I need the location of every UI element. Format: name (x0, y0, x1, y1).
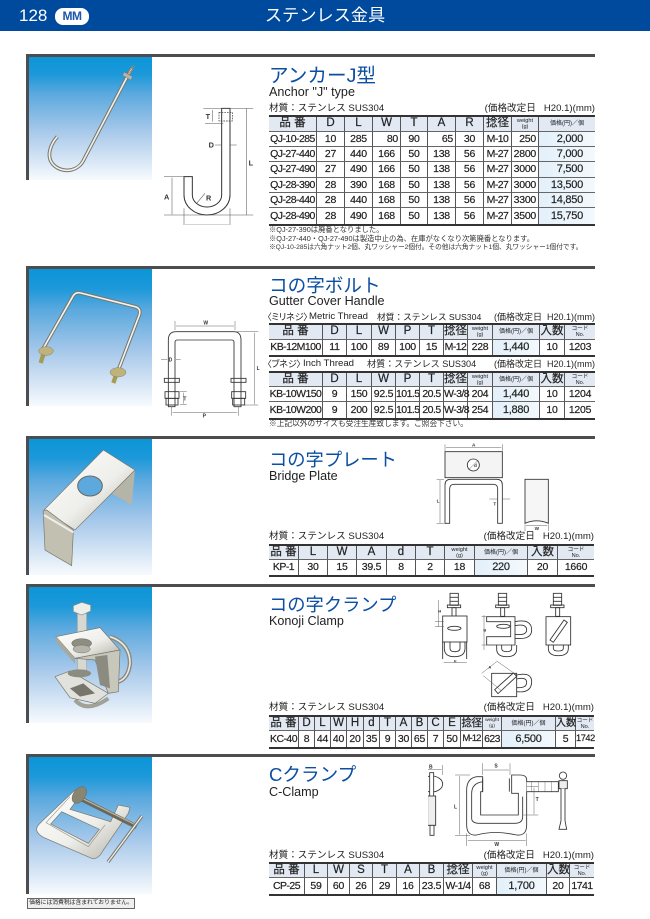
table: bridge plate: A (368, 546, 375, 558)
table: konoji clamp: D (302, 717, 311, 729)
table: Anchor J specifications: 138 (433, 163, 450, 175)
revision date: (価格改定日 H20.1)(mm) (484, 850, 594, 861)
table: Anchor J specifications: 56 (464, 148, 475, 160)
diagram: konoji clamp views: H (438, 608, 441, 613)
table: C clamp: 16 (402, 880, 414, 892)
table: metric thread: 100 (399, 341, 416, 353)
table: inch thread: D (330, 373, 339, 385)
table: inch thread: 9 (332, 388, 337, 400)
table: Anchor J specifications: 168 (378, 210, 395, 222)
table: Anchor J specifications: 440 (350, 194, 367, 206)
material line: 材質：ステンレス SUS304 (269, 103, 384, 114)
table: inch thread: (g) (477, 380, 483, 386)
table: konoji clamp: 6,500 (515, 732, 542, 744)
table: C clamp: 68 (479, 880, 490, 892)
table: Anchor J specifications: 390 (350, 179, 367, 191)
table: inch thread: W (378, 373, 389, 385)
table: Anchor J specifications: D (326, 117, 335, 129)
table: inch thread: 価格(円)／個 (499, 376, 533, 382)
page title: ステンレス金具 (265, 5, 385, 25)
table: konoji clamp: KC-40 (270, 733, 297, 745)
diagram: J bolt dimensions: A (164, 192, 170, 201)
tax note: 価格には消費税は含まれておりません。 (29, 900, 133, 906)
table: inch thread: 捻径 (444, 373, 467, 385)
revision date: (価格改定日 H20.1)(mm) (494, 312, 595, 322)
table: metric thread: T (428, 325, 435, 337)
revision date: (価格改定日 H20.1)(mm) (484, 702, 594, 713)
table: inch thread: 20.5 (422, 388, 441, 400)
diagram: bridge plate dimensions: L (437, 498, 440, 503)
table: metric thread: L (356, 325, 362, 337)
diagram: J bolt dimensions (164, 108, 254, 225)
notes: ※QJ-27-390は廃番となりました。 (269, 225, 384, 234)
table: Anchor J specifications: 56 (464, 210, 475, 222)
table: metric thread: 1203 (569, 341, 591, 353)
table: Anchor J specifications: 490 (350, 210, 367, 222)
table: bridge plate: 220 (492, 561, 510, 573)
table: metric thread: (g) (477, 332, 483, 338)
material line: 材質：ステンレス SUS304 (269, 850, 384, 861)
photo: bridge plate (29, 439, 152, 575)
table: C clamp: 60 (333, 880, 344, 892)
diagram: J bolt dimensions: T (206, 112, 211, 121)
photo: C clamp (29, 757, 152, 894)
inch thread line: Inch Thread (303, 358, 354, 369)
table: konoji clamp: 35 (366, 733, 377, 745)
table: konoji clamp: 入数 (556, 718, 576, 728)
table: inch thread: 10 (546, 388, 558, 400)
table: Anchor J specifications: 15,750 (551, 210, 583, 222)
table: Anchor J specifications: M-27 (487, 148, 508, 160)
table: Anchor J specifications: 30 (464, 133, 475, 145)
table: Anchor J specifications: 3300 (514, 194, 536, 206)
table: Anchor J specifications: 90 (408, 133, 420, 145)
table: bridge plate: 1660 (565, 561, 587, 573)
table: Anchor J specifications: 50 (408, 163, 420, 175)
table: Anchor J specifications: 56 (464, 163, 475, 175)
table: Anchor J specifications: 50 (408, 194, 420, 206)
table: Anchor J specifications: M-27 (487, 179, 508, 191)
panel: Anchor J type (26, 54, 595, 251)
logo: MM: MM (62, 9, 82, 23)
photo: konoji clamp (29, 587, 152, 723)
table: konoji clamp: L (319, 717, 326, 729)
table: bridge plate: 18 (454, 561, 465, 573)
table: C clamp (269, 862, 594, 896)
diagram: C clamp dimensions: W (494, 842, 499, 848)
table: Anchor J specifications: 138 (433, 210, 450, 222)
table: Anchor J specifications: QJ-28-490 (270, 210, 315, 222)
table: bridge plate: 2 (427, 561, 433, 573)
table: bridge plate: No. (572, 552, 580, 558)
table: konoji clamp: C (431, 717, 440, 729)
inch thread line: 材質：ステンレス SUS304 (367, 359, 476, 369)
table: bridge plate: L (310, 546, 316, 558)
table: konoji clamp: T (384, 717, 391, 729)
notes (269, 225, 582, 251)
heading: C clamp: Cクランプ (269, 764, 356, 785)
header bar (0, 0, 650, 31)
table: Anchor J specifications: 168 (378, 179, 395, 191)
diagram: C clamp dimensions: S (494, 764, 498, 770)
table: Anchor J specifications: QJ-10-285 (270, 133, 315, 145)
table: bridge plate: 15 (336, 561, 348, 573)
table: konoji clamp: E (448, 717, 456, 729)
table: Anchor J specifications: 品 番 (279, 117, 306, 129)
table: Anchor J specifications: T (410, 117, 418, 129)
revision date: (価格改定日 H20.1)(mm) (494, 359, 595, 369)
table: bridge plate: (g) (456, 552, 463, 558)
table: C clamp: A (404, 864, 412, 876)
table: C clamp: 1,700 (508, 880, 535, 892)
table: inch thread (269, 371, 595, 420)
table: Anchor J specifications: 440 (350, 148, 367, 160)
table: Anchor J specifications: 捻径 (486, 117, 509, 129)
diagram: U bolt dimensions: T (183, 396, 186, 402)
tax note (27, 898, 135, 909)
table: Anchor J specifications: 50 (408, 148, 420, 160)
diagram: U bolt dimensions: L (257, 366, 260, 372)
table: Anchor J specifications: M-10 (487, 133, 508, 145)
table: C clamp: weight (476, 864, 493, 870)
table: inch thread: 10 (546, 404, 558, 416)
heading: U bolt: コの字ボルト (269, 275, 381, 296)
panel: Bridge Plate (26, 436, 595, 577)
heading: English name: Bridge Plate (269, 469, 338, 483)
table: konoji clamp: H (351, 717, 359, 729)
table: bridge plate: 入数 (531, 546, 554, 558)
table: C clamp: L (313, 864, 319, 876)
material line: 材質：ステンレス SUS304 (269, 702, 384, 713)
table: inch thread: 101.5 (396, 404, 420, 416)
diagram: bridge plate dimensions (436, 443, 549, 531)
table: Anchor J specifications: A (438, 117, 445, 129)
table: bridge plate: T (426, 546, 434, 558)
table: metric thread: D (330, 325, 339, 337)
table: Anchor J specifications: 2800 (514, 148, 536, 160)
table: C clamp: CP-25 (273, 880, 300, 892)
table: konoji clamp: W (333, 717, 344, 729)
table: bridge plate: weight (451, 546, 468, 552)
table: C clamp: W (333, 864, 344, 876)
table: inch thread: No. (576, 380, 584, 386)
table: inch thread: 1,440 (503, 388, 529, 400)
diagram: J bolt dimensions: L (249, 158, 254, 167)
table: inch thread: W-3/8 (444, 388, 469, 400)
table: metric thread: 入数 (540, 325, 564, 337)
table: konoji clamp: 50 (446, 733, 458, 745)
diagram: J bolt dimensions: R (206, 193, 212, 202)
table: inch thread: 1205 (569, 404, 591, 416)
diagram: konoji clamp views: A (488, 664, 491, 669)
table: Anchor J specifications: R (465, 117, 474, 129)
inch thread line (267, 358, 476, 369)
table: metric thread: P (404, 325, 411, 337)
table: bridge plate: 39.5 (362, 561, 381, 573)
table: konoji clamp: 8 (304, 733, 309, 745)
table: Anchor J specifications: 27 (325, 163, 336, 175)
table: C clamp: T (381, 864, 388, 876)
diagram: konoji clamp views (435, 592, 572, 698)
table: Anchor J specifications: M-27 (487, 210, 508, 222)
table: konoji clamp: 品 番 (270, 717, 297, 729)
table: bridge plate: 価格(円)／個 (484, 550, 518, 556)
table: Anchor J specifications: 138 (433, 194, 450, 206)
diagram: bridge plate dimensions: T (493, 502, 496, 507)
panel: Konoji Clamp (26, 584, 595, 749)
table: Anchor J specifications: 56 (464, 194, 475, 206)
table: Anchor J specifications: 168 (378, 194, 395, 206)
table: C clamp: 29 (379, 880, 390, 892)
diagram: konoji clamp views: B (483, 628, 486, 633)
table: Anchor J specifications: 28 (325, 194, 336, 206)
table: Anchor J specifications: 28 (325, 210, 336, 222)
table: Anchor J specifications: 7,500 (557, 163, 583, 175)
table: Anchor J specifications: QJ-28-440 (270, 194, 315, 206)
table: metric thread (269, 323, 595, 357)
table: Anchor J specifications: 56 (464, 179, 475, 191)
revision date: (価格改定日 H20.1)(mm) (485, 103, 595, 114)
table: Anchor J specifications: 13,500 (551, 178, 583, 190)
diagram: U bolt dimensions (161, 320, 260, 420)
table: Anchor J specifications: 27 (325, 148, 336, 160)
table: konoji clamp: 20 (349, 733, 361, 745)
heading: English name: Anchor "J" type (269, 85, 355, 99)
table: konoji clamp: 623 (484, 733, 500, 745)
heading: English name: C-Clamp (269, 785, 319, 799)
table: konoji clamp: 7 (433, 733, 438, 745)
diagram: bridge plate dimensions: W (535, 526, 540, 531)
table: Anchor J specifications: 250 (519, 133, 536, 145)
diagram: konoji clamp views: E (454, 658, 457, 663)
table: Anchor J specifications: 28 (325, 179, 336, 191)
notes: ※QJ-27-440・QJ-27-490は製造中止の為、在庫がなくなり次第廃番となります。 (269, 234, 534, 243)
heading: bridge plate: コの字プレート (269, 449, 397, 470)
table: Anchor J specifications: 50 (408, 179, 420, 191)
table: inch thread: 1204 (569, 388, 591, 400)
table: Anchor J specifications: 価格(円)／個 (550, 121, 584, 127)
table: Anchor J specifications: 3500 (514, 210, 536, 222)
table: inch thread: コード (572, 374, 588, 380)
table: konoji clamp: 65 (414, 733, 425, 745)
metric thread line: 〈ミリネジ〉 (267, 312, 308, 322)
table: inch thread: W-3/8 (444, 404, 469, 416)
table: Anchor J specifications: 80 (387, 133, 398, 145)
table: inch thread: KB-10W200 (270, 404, 321, 416)
table: inch thread: KB-10W150 (270, 388, 321, 400)
table: inch thread: 101.5 (396, 388, 420, 400)
table: metric thread: 11 (329, 341, 340, 353)
table: Anchor J specifications: 7,000 (557, 148, 583, 160)
logo: MM (55, 8, 89, 25)
diagram: bridge plate dimensions: d (474, 463, 477, 468)
diagram: J bolt dimensions: D (209, 140, 214, 149)
page number: 128 (19, 6, 47, 25)
table: konoji clamp: 9 (385, 733, 390, 745)
table: C clamp: S (357, 864, 365, 876)
table: bridge plate: コード (568, 546, 584, 552)
table: Anchor J specifications: 2,000 (557, 132, 583, 144)
table: konoji clamp: 捻径 (462, 717, 482, 729)
table: bridge plate: 品 番 (270, 546, 297, 558)
table: inch thread: P (404, 373, 411, 385)
table: inch thread: 92.5 (374, 404, 393, 416)
table: C clamp: B (428, 864, 435, 876)
table: inch thread: 92.5 (374, 388, 393, 400)
table: C clamp: 捻径 (446, 864, 470, 876)
table: Anchor J specifications: 138 (433, 179, 450, 191)
table: inch thread: weight (472, 374, 488, 380)
photo: anchor J bolt (29, 57, 152, 180)
notes: ※QJ-10-285は六角ナット2個、丸ワッシャー2個付。その他は六角ナット1個、丸ワッシャー1個付です。 (269, 244, 582, 251)
table: inch thread: 9 (332, 404, 337, 416)
table: C clamp: 20 (552, 880, 564, 892)
table: inch thread: 20.5 (422, 404, 441, 416)
table: Anchor J specifications: 50 (408, 210, 420, 222)
table: C clamp: 1741 (571, 880, 593, 892)
table: inch thread: L (356, 373, 362, 385)
heading: English name: Gutter Cover Handle (269, 294, 384, 308)
table: metric thread: 89 (378, 341, 389, 353)
table: inch thread: 254 (472, 404, 488, 416)
table: Anchor J specifications: 285 (350, 133, 367, 145)
table: bridge plate: 20 (537, 561, 548, 573)
table: inch thread: 1,880 (503, 404, 529, 416)
table: Anchor J specifications: 3000 (514, 179, 536, 191)
table: metric thread: 価格(円)／個 (499, 329, 533, 335)
table: Anchor J specifications: 14,850 (551, 194, 583, 206)
table: metric thread: 228 (472, 341, 488, 353)
table: metric thread: M-12 (445, 341, 466, 353)
panel: Gutter Cover Handle (26, 266, 595, 428)
table: konoji clamp: (g) (489, 724, 495, 728)
table: konoji clamp: 44 (317, 733, 328, 745)
table: Anchor J specifications (269, 115, 595, 226)
diagram: U bolt dimensions: D (169, 357, 173, 363)
table: konoji clamp: 5 (563, 733, 568, 745)
diagram: U bolt dimensions: W (203, 320, 208, 326)
table: metric thread: 15 (426, 341, 437, 353)
table: bridge plate: d (398, 546, 404, 558)
table: Anchor J specifications: QJ-28-390 (270, 179, 315, 191)
table: metric thread: No. (576, 332, 584, 338)
panel: C-Clamp (26, 754, 595, 896)
table: konoji clamp: 40 (333, 733, 344, 745)
heading: Anchor J: アンカーJ型 (269, 65, 376, 87)
table: metric thread: 品 番 (282, 325, 309, 337)
table: Anchor J specifications: L (355, 117, 362, 129)
table: konoji clamp: A (400, 717, 407, 729)
photo: U bolt (29, 269, 152, 406)
table: Anchor J specifications: weight (517, 118, 533, 124)
table: C clamp: W-1/4 (445, 880, 471, 892)
table: Anchor J specifications: 166 (378, 163, 395, 175)
table: Anchor J specifications: M-27 (487, 163, 508, 175)
table: C clamp: No. (578, 870, 586, 876)
table: konoji clamp: 価格(円)／個 (512, 720, 546, 726)
table: metric thread: コード (572, 326, 588, 332)
inch thread line: 〈ブネジ〉 (267, 359, 301, 369)
table: metric thread: 10 (546, 341, 558, 353)
table: Anchor J specifications: 138 (433, 148, 450, 160)
table: Anchor J specifications: W (381, 117, 392, 129)
table: inch thread: 入数 (540, 373, 564, 385)
table: inch thread: T (428, 373, 435, 385)
table: konoji clamp: d (368, 717, 375, 729)
table: metric thread: W (378, 325, 389, 337)
table: konoji clamp (269, 715, 594, 749)
table: bridge plate: KP-1 (273, 561, 294, 573)
table: C clamp: 品 番 (273, 864, 300, 876)
table: bridge plate: W (337, 546, 347, 558)
heading: konoji clamp: コの字クランプ (269, 594, 396, 615)
diagram: bridge plate dimensions: A (472, 443, 476, 448)
table: konoji clamp: weight (485, 718, 499, 722)
table: bridge plate: 8 (398, 561, 404, 573)
diagram: C clamp dimensions: L (454, 805, 457, 811)
diagram: U bolt dimensions: P (203, 414, 207, 420)
table: Anchor J specifications: 10 (325, 133, 336, 145)
heading: English name: Konoji Clamp (269, 614, 344, 628)
table: C clamp: コード (574, 864, 590, 870)
table: inch thread: 150 (351, 388, 367, 400)
diagram: C clamp dimensions (428, 763, 568, 848)
table: inch thread: 品 番 (282, 373, 309, 385)
table: konoji clamp: No. (581, 724, 589, 730)
table: metric thread: KB-12M100 (270, 341, 321, 353)
table: metric thread: 100 (351, 341, 367, 353)
table: C clamp: (g) (481, 870, 488, 876)
table: C clamp: 価格(円)／個 (504, 868, 538, 874)
metric thread line (267, 311, 482, 322)
table: bridge plate (269, 544, 594, 577)
table: Anchor J specifications: 65 (442, 133, 453, 145)
table: C clamp: 入数 (547, 864, 570, 876)
table: Anchor J specifications: QJ-27-440 (270, 148, 315, 160)
note: ※上記以外のサイズも受注生産致します。ご照会下さい。 (269, 419, 468, 428)
table: Anchor J specifications: 3000 (514, 163, 536, 175)
table: konoji clamp: 30 (398, 733, 409, 745)
table: konoji clamp: 1742 (576, 733, 595, 743)
table: metric thread: 1,440 (503, 341, 529, 353)
material line: 材質：ステンレス SUS304 (269, 531, 384, 542)
table: Anchor J specifications: (g) (522, 124, 528, 130)
table: Anchor J specifications: QJ-27-490 (270, 163, 315, 175)
table: C clamp: 23.5 (422, 880, 441, 892)
table: metric thread: weight (472, 326, 488, 332)
revision date: (価格改定日 H20.1)(mm) (484, 531, 594, 542)
table: Anchor J specifications: 490 (350, 163, 367, 175)
table: konoji clamp: B (416, 717, 423, 729)
table: Anchor J specifications: M-27 (487, 194, 508, 206)
table: inch thread: 200 (351, 404, 367, 416)
metric thread line: 材質：ステンレス SUS304 (377, 312, 481, 322)
table: C clamp: 26 (355, 880, 367, 892)
metric thread line: Metric Thread (309, 311, 368, 322)
diagram: C clamp dimensions: B (429, 765, 433, 771)
table: konoji clamp: M-12 (462, 733, 481, 744)
table: bridge plate: 30 (307, 561, 319, 573)
diagram: C clamp dimensions: T (536, 797, 539, 803)
table: C clamp: 59 (310, 880, 322, 892)
table: inch thread: 204 (472, 388, 488, 400)
table: konoji clamp: コード (577, 718, 593, 724)
table: metric thread: 捻径 (444, 325, 467, 337)
table: Anchor J specifications: 166 (378, 148, 395, 160)
